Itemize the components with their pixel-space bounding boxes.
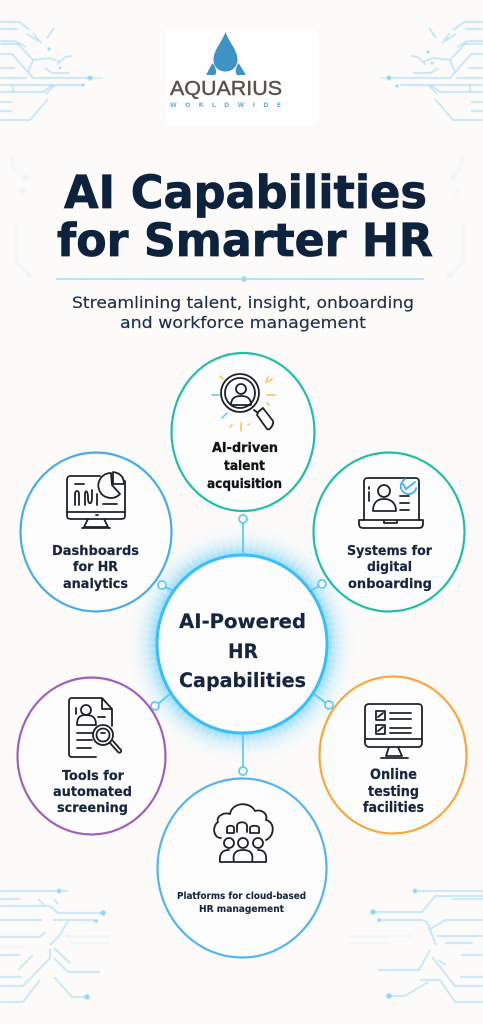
icon: monitor with checklist (365, 704, 422, 758)
logo wordmark: AQUARIUS (170, 78, 282, 100)
label (52, 543, 139, 592)
central hub (157, 555, 327, 733)
icon: cloud with people (214, 804, 273, 862)
panel: Online testing facilities (320, 676, 466, 834)
circuit decoration: bottom left (0, 889, 110, 1002)
label: Dashboards (52, 543, 139, 559)
circuit decoration: bottom right (350, 889, 483, 1002)
label (53, 768, 132, 816)
label (207, 440, 282, 492)
title: for Smarter HR (57, 214, 433, 267)
label: Systems for (347, 543, 432, 559)
icon: water drop (214, 32, 238, 72)
logo: Aquarius Worldwide (165, 28, 317, 126)
panel: AI-driven talent acquisition (172, 353, 314, 511)
label: HR management (199, 904, 284, 915)
icon: laptop with profile (359, 478, 423, 528)
label (363, 767, 424, 816)
label: onboarding (348, 576, 432, 592)
label: Tools for (62, 768, 124, 784)
label: for HR (73, 559, 119, 575)
title: AI Capabilities (64, 166, 427, 219)
icon: resume with magnifier (69, 698, 121, 757)
logo tagline: WORLDWIDE (170, 102, 281, 109)
label: Online (370, 767, 417, 783)
connectors and nodes (151, 515, 333, 775)
panel: Systems for digital onboarding (314, 452, 464, 612)
label: AI-driven (212, 440, 278, 456)
central hub: HR (228, 640, 258, 663)
label: screening (57, 800, 128, 816)
label: testing (368, 784, 419, 800)
panel: Platforms for cloud-based HR management (158, 778, 326, 958)
title divider (56, 276, 424, 282)
subtitle (72, 293, 414, 332)
panel: Tools for automated screening (18, 678, 166, 834)
circuit decoration: top right (380, 22, 483, 120)
title (57, 166, 433, 267)
central glow (124, 522, 360, 766)
panel: Dashboards for HR analytics (20, 452, 172, 612)
label (347, 543, 432, 592)
subtitle: and workforce management (120, 313, 366, 332)
icon: magnifier with person (212, 374, 275, 431)
label: facilities (363, 800, 424, 816)
central hub: Capabilities (179, 669, 306, 692)
label: analytics (63, 576, 128, 592)
icon: logo right foot (236, 63, 246, 75)
icon: monitor with pie chart (67, 472, 125, 528)
label: digital (367, 559, 412, 575)
icon: logo left foot (206, 63, 216, 75)
label (177, 891, 306, 915)
label: Platforms for cloud-based (177, 891, 306, 902)
label: acquisition (207, 476, 282, 492)
label: talent (224, 458, 265, 474)
circuit decoration: title right (448, 155, 463, 277)
circuit decoration: top left (0, 22, 103, 120)
label: automated (53, 784, 132, 800)
subtitle: Streamlining talent, insight, onboarding (72, 293, 414, 312)
circuit decoration: title left (12, 155, 31, 277)
central hub: AI-Powered (179, 610, 306, 633)
